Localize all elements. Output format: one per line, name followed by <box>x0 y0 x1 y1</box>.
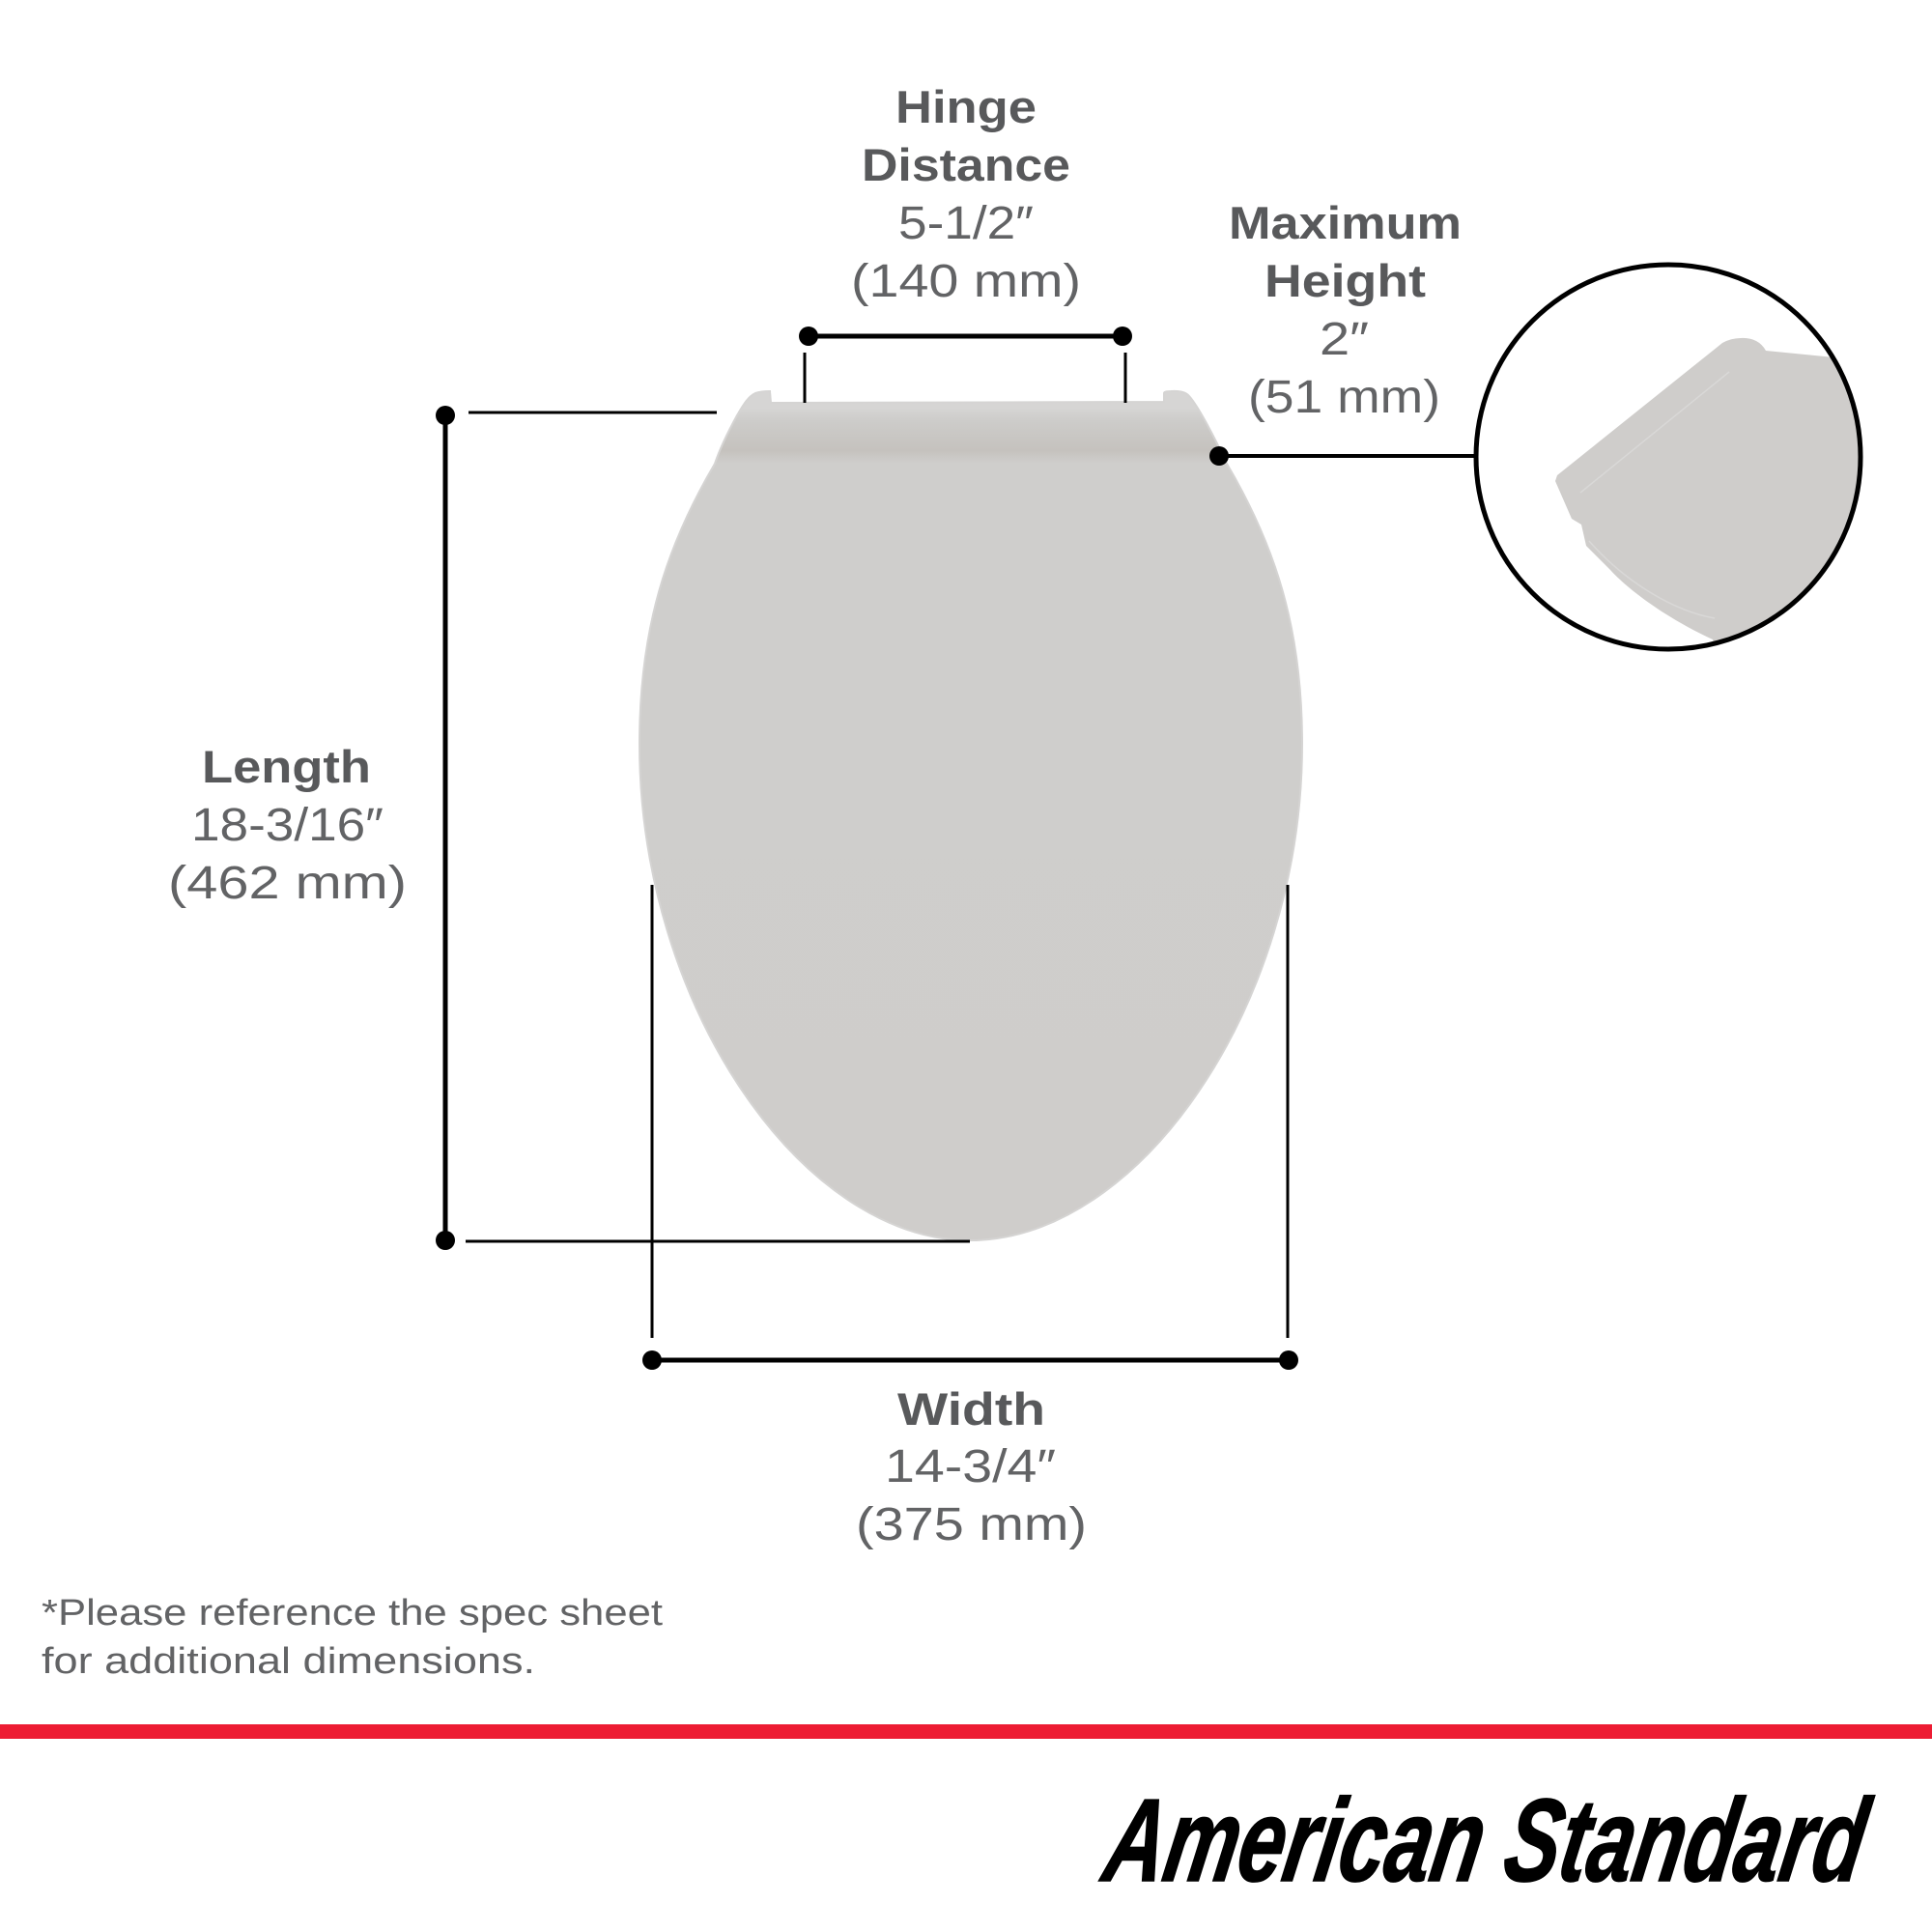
maximum height leader line <box>1209 446 1476 466</box>
dimension: width <box>642 885 1298 1550</box>
red divider bar <box>0 1724 1932 1739</box>
length label: (462 mm) <box>168 858 407 909</box>
footnote: for additional dimensions. <box>42 1641 535 1682</box>
width label: Width <box>897 1383 1045 1435</box>
length label <box>168 741 407 909</box>
hinge distance label: (140 mm) <box>851 256 1081 307</box>
length label: 18-3/16″ <box>191 800 384 851</box>
dimension: hinge distance <box>799 81 1132 403</box>
maximum height label <box>1229 197 1462 423</box>
hinge distance label: Distance <box>862 139 1070 190</box>
toilet seat <box>639 391 1302 1240</box>
dimension: length <box>168 406 970 1250</box>
width label: 14-3/4″ <box>885 1441 1056 1492</box>
length bracket <box>436 406 970 1250</box>
footnote <box>42 1593 664 1682</box>
hinge distance label <box>851 81 1081 307</box>
maximum height label: Height <box>1264 255 1426 306</box>
width label <box>856 1383 1087 1550</box>
footnote: *Please reference the spec sheet <box>42 1593 664 1634</box>
width label: (375 mm) <box>856 1499 1087 1550</box>
hinge distance label: 5-1/2″ <box>898 198 1034 249</box>
dimension: maximum height <box>1209 197 1884 676</box>
hinge distance bracket <box>799 327 1132 403</box>
maximum height label: (51 mm) <box>1248 372 1440 423</box>
length label: Length <box>202 741 371 792</box>
side view inset circle <box>1476 265 1884 676</box>
maximum height label: Maximum <box>1229 197 1462 248</box>
maximum height label: 2″ <box>1320 314 1369 365</box>
hinge distance label: Hinge <box>895 81 1037 132</box>
width bracket <box>642 885 1298 1370</box>
